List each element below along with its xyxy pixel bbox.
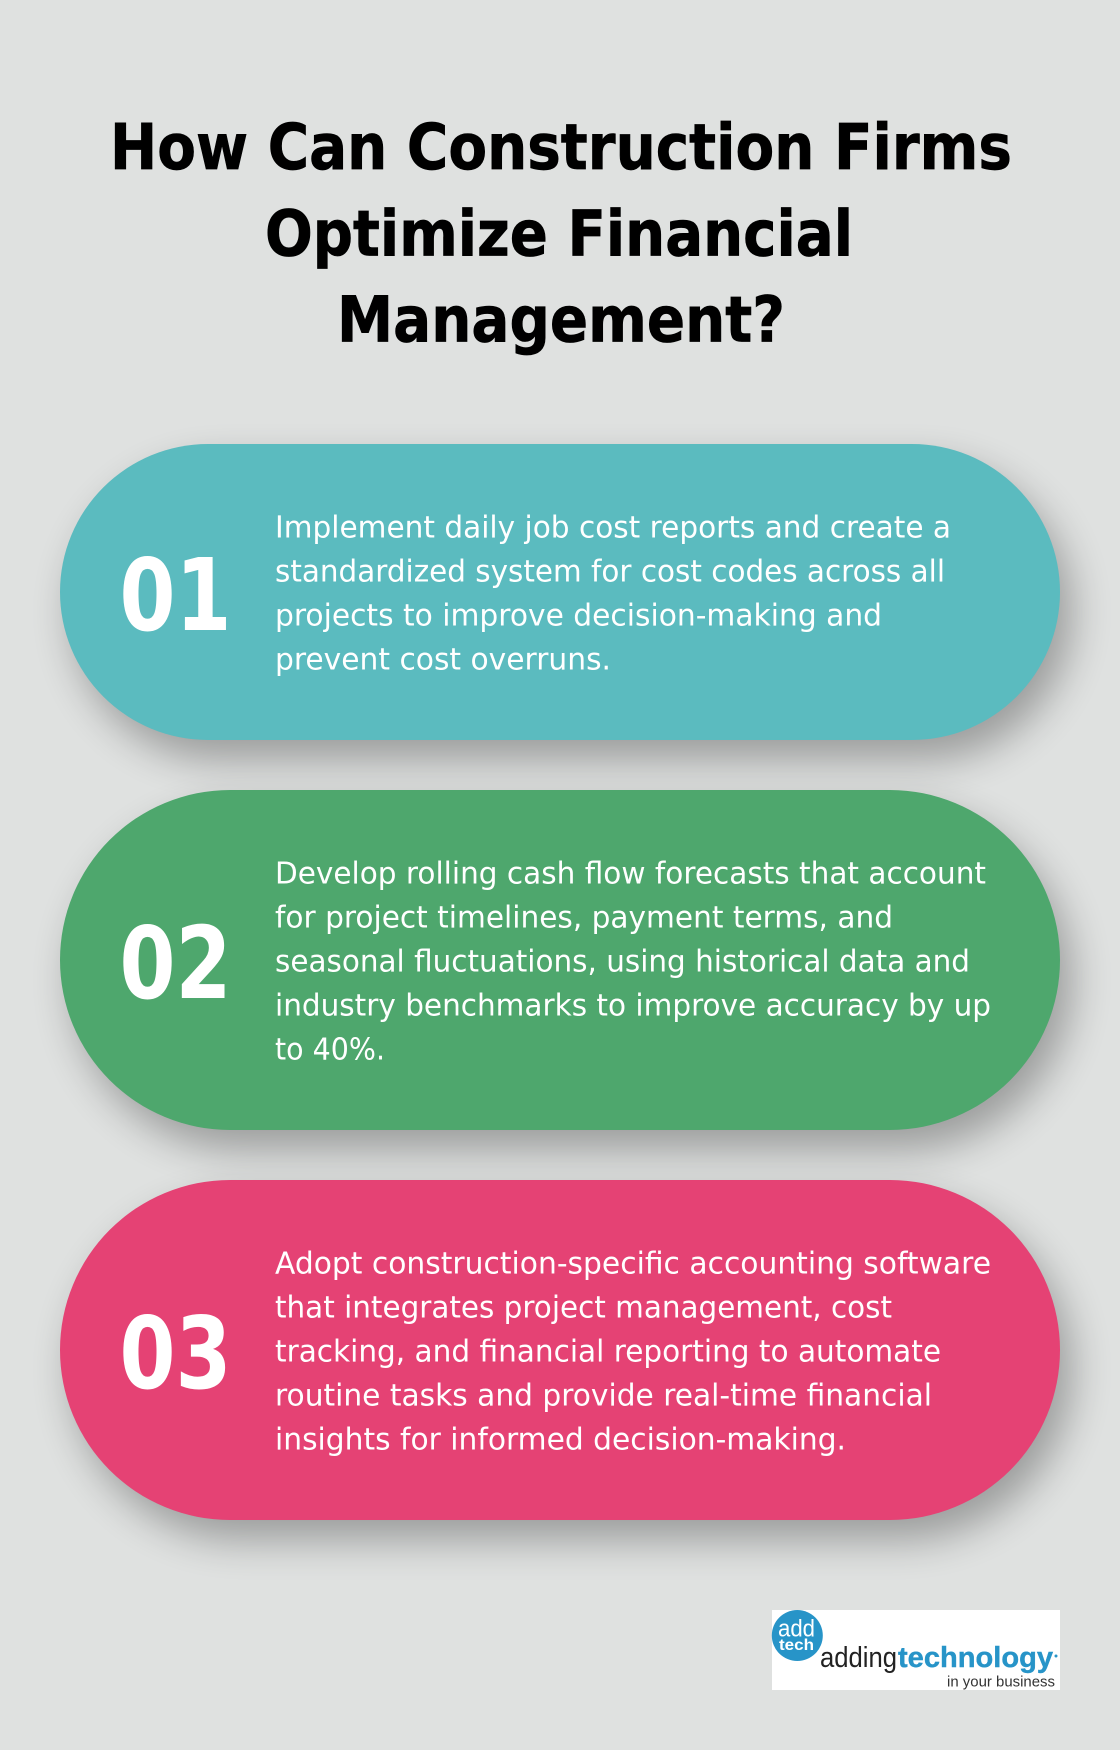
step 02 description: Develop rolling cash flow forecasts that account — [275, 856, 986, 892]
icon: add tech circle: tech — [779, 1637, 814, 1654]
step number 01: 01 — [120, 537, 232, 654]
step 03 description: routine tasks and provide real-time financial — [275, 1378, 932, 1414]
step 02 description: industry benchmarks to improve accuracy by up — [275, 988, 991, 1024]
logo wordmark: technology — [898, 1642, 1053, 1674]
step 02 description — [275, 856, 991, 1068]
icon: add tech circle: add — [778, 1616, 815, 1642]
step 02 description: seasonal fluctuations, using historical data and — [275, 944, 970, 980]
step 01 description: prevent cost overruns. — [275, 642, 611, 678]
step number 02: 02 — [120, 905, 232, 1022]
panel: step 03 — [60, 1180, 1072, 1540]
step 03 description: Adopt construction-specific accounting software — [275, 1246, 991, 1282]
step 03 description: insights for informed decision-making. — [275, 1422, 846, 1458]
logo wordmark: adding — [820, 1642, 897, 1674]
icon: add tech circle — [772, 1610, 823, 1661]
logo wordmark — [820, 1642, 1058, 1674]
title: Management? — [337, 284, 785, 356]
step 02 description: to 40%. — [275, 1032, 385, 1068]
title — [110, 111, 1012, 356]
step number 03: 03 — [120, 1295, 232, 1412]
title: How Can Construction Firms — [110, 111, 1012, 184]
step 03 description: that integrates project management, cost — [275, 1290, 892, 1326]
step 01 description: projects to improve decision-making and — [275, 598, 882, 634]
step 01 description: Implement daily job cost reports and create a — [275, 510, 951, 546]
panel: step 02 — [60, 790, 1072, 1150]
step 01 description — [275, 510, 951, 678]
title: Optimize Financial — [265, 198, 853, 270]
logo: adding technology — [772, 1610, 1060, 1690]
panel: step 01 — [60, 444, 1072, 760]
step 02 description: for project timelines, payment terms, and — [275, 900, 893, 936]
step 01 description: standardized system for cost codes across all — [275, 554, 945, 590]
step 03 description — [275, 1246, 991, 1458]
logo tagline: in your business — [947, 1674, 1055, 1690]
step 03 description: tracking, and financial reporting to automate — [275, 1334, 941, 1370]
